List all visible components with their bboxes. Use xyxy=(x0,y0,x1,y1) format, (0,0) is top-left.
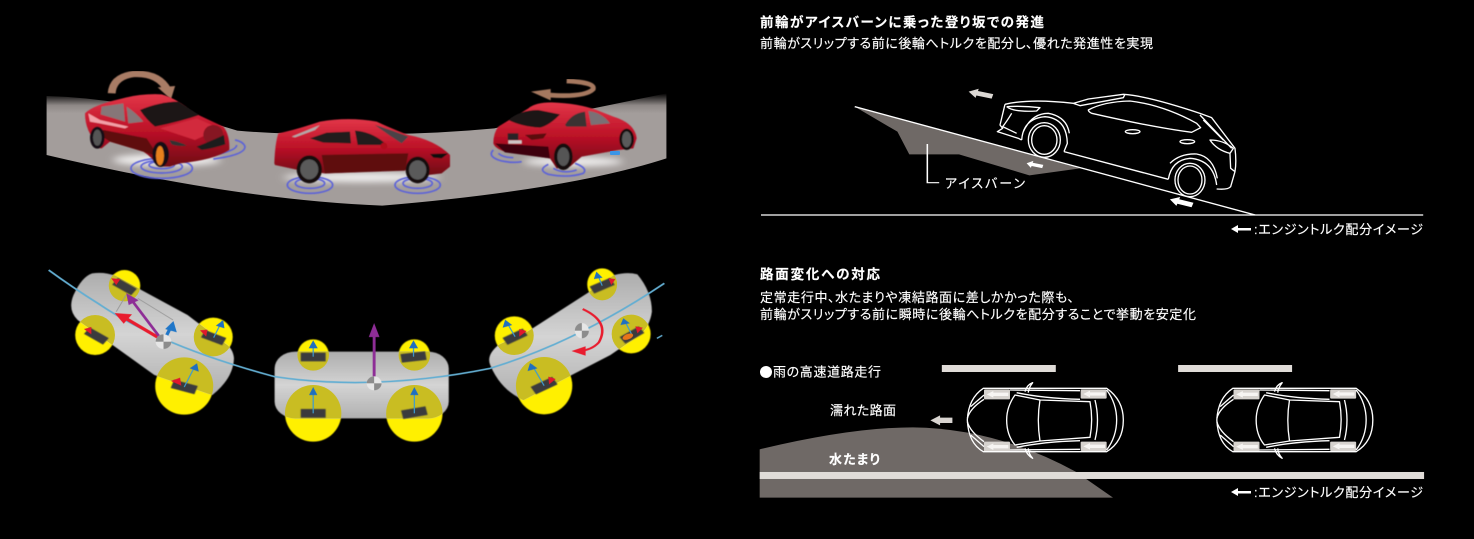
slope line xyxy=(855,107,1255,215)
small blue line fragment xyxy=(657,335,662,338)
body centre car xyxy=(274,119,450,183)
label: rainy highway: 雨の高速道路走行 xyxy=(773,364,881,380)
ice patch xyxy=(855,107,1080,175)
left car turning in xyxy=(85,94,245,178)
bright yellow load circles xyxy=(75,268,651,442)
subheading: uphill start description: 前輪がスリップする前に後輪へトルクを配分し、優れた発進性を実現 xyxy=(760,36,1153,51)
right car turning out xyxy=(491,102,637,176)
red lateral force arrow xyxy=(115,313,159,338)
diagram: car on icy slope xyxy=(761,87,1423,215)
purple resultant arrow centre xyxy=(369,323,380,382)
red tyre force arrows xyxy=(84,278,643,386)
tyres xyxy=(84,278,644,419)
ice label: アイスバーン xyxy=(945,176,1025,191)
blue tyre force arrows xyxy=(184,272,632,413)
ice leader line xyxy=(927,144,939,183)
road base xyxy=(760,365,1424,498)
load circles over car bodies xyxy=(80,275,648,418)
description: road change: 定常走行中、水たまりや凍結路面に差しかかった際も、 xyxy=(760,290,1074,305)
heading: road change: 路面変化への対応 xyxy=(760,266,880,282)
car top view right xyxy=(1217,383,1373,458)
diagram: wet highway xyxy=(760,365,1424,498)
brown rotation arrow left xyxy=(112,74,175,99)
ripples centre car xyxy=(287,177,440,193)
blue driving line xyxy=(49,270,664,383)
small blue tag xyxy=(610,151,620,155)
car top view left xyxy=(967,383,1123,458)
rear wheel xyxy=(1168,154,1217,197)
label: puddle: 水たまり xyxy=(829,452,880,467)
label: wet road: 濡れた路面 xyxy=(830,403,896,418)
centre of gravity markers xyxy=(156,323,589,390)
heading: uphill start: 前輪がアイスバーンに乗った登り坂での発進 xyxy=(760,14,1044,30)
chart: tyre force top-view diagram xyxy=(49,268,664,442)
slope base xyxy=(761,107,1423,215)
front wheel xyxy=(1022,113,1069,157)
centre car xyxy=(274,119,450,193)
torque arrows xyxy=(967,87,1194,209)
legend: engine torque upper: :エンジントルク配分イメージ xyxy=(1254,222,1423,237)
ripples right car xyxy=(491,150,585,176)
ground line xyxy=(761,213,1423,217)
road lines xyxy=(760,365,1424,479)
ripples left car xyxy=(131,140,245,178)
legend: engine torque lower: :エンジントルク配分イメージ xyxy=(1254,485,1423,500)
road surface xyxy=(47,93,666,206)
thin construction lines xyxy=(116,295,173,320)
grey car silhouettes xyxy=(71,273,652,418)
car glow on road xyxy=(113,154,623,182)
blue body arrow xyxy=(165,321,177,339)
description: road change: 前輪がスリップする前に瞬時に後輪へトルクを配分することで挙動を安定化 xyxy=(760,307,1196,322)
puddle xyxy=(760,427,1113,498)
brown rotation arrow right xyxy=(531,81,593,100)
car outline xyxy=(997,94,1236,197)
panel: road with three cars cornering xyxy=(47,74,666,206)
body right car xyxy=(493,102,637,170)
orange slipping tyre mark xyxy=(621,332,635,341)
description: road change xyxy=(760,290,1196,322)
torque arrow ahead of car xyxy=(930,415,952,425)
red yaw arrow xyxy=(571,309,602,356)
purple resultant arrow left xyxy=(126,293,161,338)
body left car xyxy=(85,94,229,167)
